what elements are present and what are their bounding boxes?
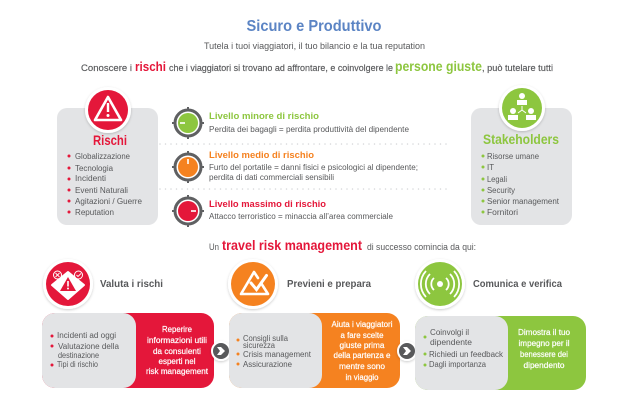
card list: [236, 334, 312, 369]
card: [415, 316, 586, 390]
card list: Crisis management: [243, 350, 312, 359]
high risk text: [209, 199, 394, 221]
card callout: [332, 320, 393, 382]
section heading: [209, 238, 476, 253]
list: stakeholders: Fornitori: [487, 208, 518, 217]
dotted dividers: [160, 144, 450, 189]
title: Sicuro e Produttivo: [246, 18, 382, 35]
card callout: mentre sono: [339, 362, 386, 371]
list: stakeholders: Security: [487, 186, 515, 195]
list: rischi: [68, 152, 143, 217]
medium risk text: Furto del portatile = danni fisici e psicologici al dipendente;: [209, 163, 418, 172]
list: rischi: Reputation: [75, 208, 114, 217]
section heading: travel risk management: [222, 238, 362, 253]
card callout: risk management: [146, 367, 209, 376]
list: rischi: Globalizzazione: [75, 152, 131, 161]
card callout: [518, 328, 571, 370]
card list: Coinvolgi il: [430, 328, 469, 337]
arrow: [211, 341, 231, 361]
card callout: [146, 325, 209, 376]
subtitle: Tutela i tuoi viaggiatori, il tuo bilancio e la tua reputation: [204, 41, 425, 51]
intro sentence: che i viaggiatori si trovano ad affrontare, e coinvolgere le: [169, 63, 393, 73]
card callout: a fare scelte: [340, 331, 384, 340]
intro sentence: [81, 58, 553, 74]
panel: rischi: [57, 87, 158, 225]
intro sentence: , può tutelare tutti: [482, 63, 553, 73]
heading: rischi: Rischi: [93, 132, 127, 148]
card callout: dipendento: [524, 361, 565, 370]
card callout: della partenza e: [334, 351, 391, 360]
card callout: Aiuta i viaggiatori: [332, 320, 393, 329]
icon: low risk dial: [172, 107, 204, 139]
card list: Valutazione della: [58, 342, 120, 351]
list: stakeholders: Legali: [487, 175, 507, 184]
list: stakeholders: Risorse umane: [487, 152, 540, 161]
high risk text: Attacco terroristico = minaccia all’area commerciale: [209, 212, 394, 221]
icon: warning triangle: [85, 87, 131, 133]
card callout: impegno per il: [518, 339, 570, 348]
medium risk text: Livello medio di rischio: [209, 150, 314, 161]
card list: Incidenti ad oggi: [57, 331, 116, 340]
medium risk text: [209, 150, 418, 182]
card callout: da consulenti: [153, 347, 201, 356]
heading: Valuta i rischi: [100, 279, 163, 290]
card callout: Dimostra il tuo: [518, 328, 571, 337]
card: [42, 313, 214, 388]
list: rischi: Eventi Naturali: [75, 186, 128, 195]
card list: [50, 331, 120, 369]
section heading: di successo comincia da qui:: [367, 242, 476, 252]
heading: Comunica e verifica: [473, 279, 562, 290]
heading: Previeni e prepara: [287, 279, 371, 290]
card callout: giuste prima: [340, 341, 385, 350]
panel: previeni e prepara: [228, 259, 400, 388]
card list: sicurezza: [243, 341, 276, 350]
panel: comunica e verifica: [415, 259, 586, 390]
card list: Assicurazione: [243, 360, 293, 369]
icon: high risk dial: [172, 195, 204, 227]
card list: Richiedi un feedback: [429, 350, 504, 359]
card list: Tipi di rischio: [57, 360, 98, 369]
icon: signal: [415, 259, 465, 309]
intro sentence: rischi: [135, 59, 166, 74]
intro sentence: Conoscere i: [81, 63, 132, 73]
card callout: informazioni utili: [147, 336, 207, 345]
card list: dipendente: [430, 338, 473, 347]
panel: valuta i rischi: [42, 259, 214, 388]
icon: people hierarchy: [499, 85, 545, 131]
heading: stakeholders: Stakeholders: [483, 131, 559, 147]
arrow: [397, 341, 417, 361]
card list: Consigli sulla: [243, 334, 289, 343]
card list: destinazione: [58, 351, 100, 360]
low risk text: Perdita dei bagagli = perdita produttività del dipendente: [209, 125, 410, 134]
icon: medium risk dial: [172, 151, 204, 183]
high risk text: Livello massimo di rischio: [209, 199, 326, 210]
icon: assess risk: [43, 259, 93, 309]
list: rischi: Tecnologia: [75, 164, 114, 173]
list: rischi: Incidenti: [75, 174, 106, 183]
card callout: Reperire: [162, 325, 193, 334]
list: stakeholders: [482, 152, 560, 217]
card list: [424, 328, 504, 369]
card list: Dagli importanza: [429, 360, 487, 369]
icon: triangle check: [228, 259, 278, 309]
section heading: Un: [209, 242, 219, 252]
intro sentence: persone giuste: [395, 58, 482, 74]
card callout: benessere dei: [520, 350, 568, 359]
low risk text: Livello minore di rischio: [209, 111, 319, 122]
card callout: esperti nel: [158, 357, 196, 366]
list: stakeholders: IT: [487, 163, 494, 172]
low risk text: [209, 111, 410, 134]
list: stakeholders: Senior management: [487, 197, 560, 206]
medium risk text: perdita di dati commerciali sensibili: [209, 173, 334, 182]
card: [229, 313, 400, 388]
card callout: in viaggio: [346, 373, 379, 382]
list: rischi: Agitazioni / Guerre: [75, 197, 143, 206]
panel: stakeholders: [471, 85, 572, 225]
